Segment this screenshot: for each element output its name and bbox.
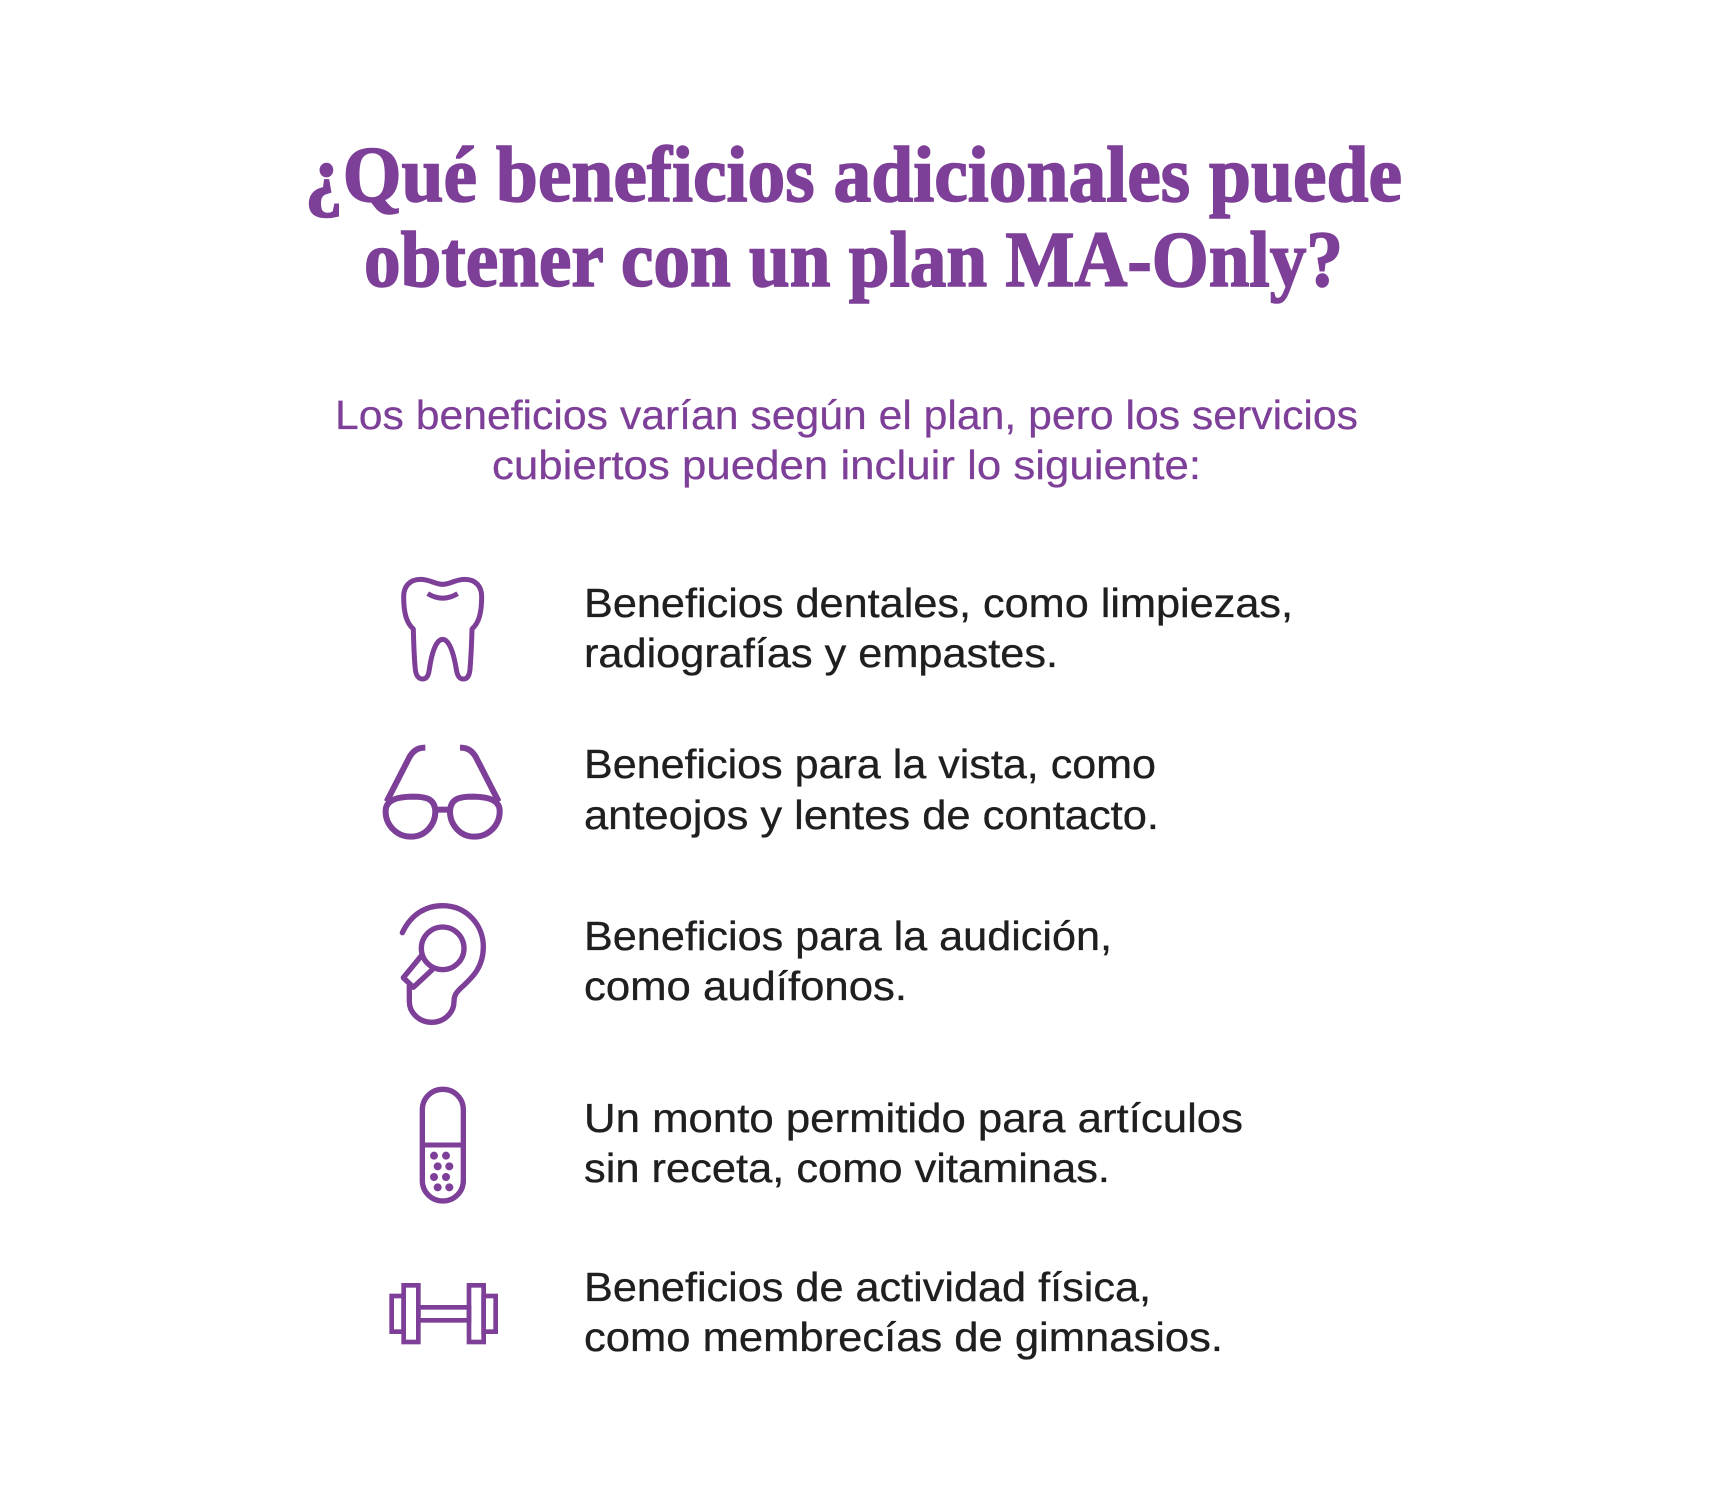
- text: vision: [584, 741, 1159, 838]
- benefit row: dental: [404, 579, 1293, 679]
- icon: ear with hearing aid: [402, 906, 483, 1022]
- title: ¿Qué beneficios adicionales puede: [305, 132, 1402, 219]
- text: vision: Beneficios para la vista, como: [584, 741, 1156, 787]
- benefit row: vision: [386, 741, 1159, 838]
- text: dental: [584, 580, 1293, 676]
- text: dental: radiografías y empastes.: [584, 630, 1058, 676]
- text: fitness: como membrecías de gimnasios.: [584, 1314, 1223, 1360]
- icon: dumbbell: [392, 1285, 496, 1342]
- subtitle: cubiertos pueden incluir lo siguiente:: [492, 442, 1201, 488]
- benefit row: fitness: [392, 1264, 1223, 1360]
- text: fitness: Beneficios de actividad física,: [584, 1264, 1151, 1310]
- text: over the counter: [584, 1095, 1243, 1191]
- icon: tooth: [404, 579, 482, 679]
- text: over the counter: Un monto permitido para artículos: [584, 1095, 1243, 1141]
- text: dental: Beneficios dentales, como limpiezas,: [584, 580, 1293, 626]
- text: hearing: [584, 913, 1112, 1009]
- title: obtener con un plan MA-Only?: [364, 217, 1343, 304]
- text: fitness: [584, 1264, 1223, 1360]
- benefit row: hearing: [402, 906, 1112, 1022]
- text: vision: anteojos y lentes de contacto.: [584, 792, 1159, 838]
- icon: capsule: [422, 1089, 463, 1201]
- text: hearing: como audífonos.: [584, 963, 907, 1009]
- text: hearing: Beneficios para la audición,: [584, 913, 1112, 959]
- icon: glasses: [386, 748, 500, 837]
- title: [305, 132, 1402, 304]
- subtitle: [335, 392, 1358, 488]
- benefit row: over the counter: [422, 1089, 1243, 1201]
- text: over the counter: sin receta, como vitaminas.: [584, 1145, 1110, 1191]
- subtitle: Los beneficios varían según el plan, pero los servicios: [335, 392, 1358, 438]
